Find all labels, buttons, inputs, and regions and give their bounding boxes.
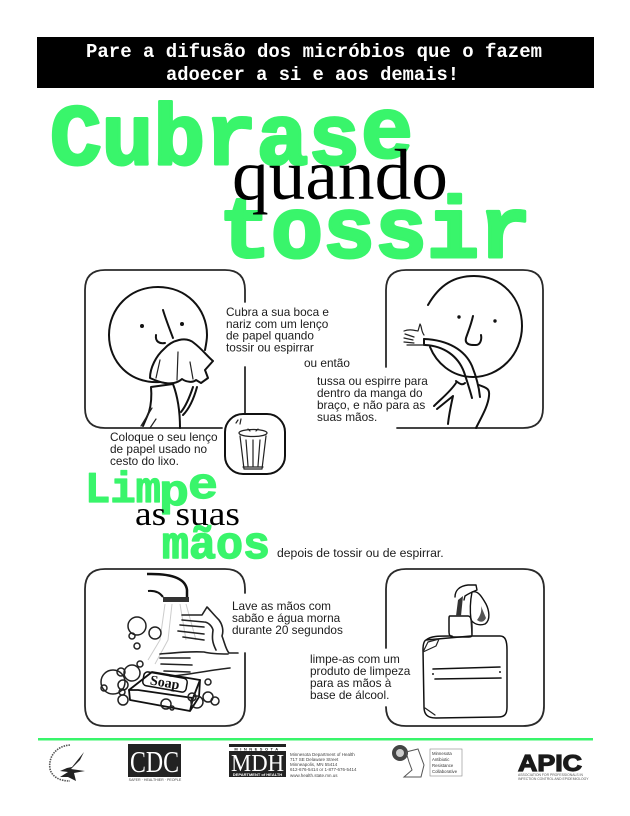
logo: Minnesota Antibiotic Resistance Collaborative: Collaborative [432, 769, 458, 774]
title: Cubrase quando tossir: e [361, 85, 413, 183]
text: MDH address: 717 SE Delaware Street [290, 757, 339, 762]
panel: hand sanitizer [386, 569, 544, 726]
text: cover mouth instructions: tossir ou espirrar [226, 340, 314, 354]
title: Limpe as suas mãos: as suas [135, 496, 240, 533]
icon: sanitizer bottle [423, 585, 507, 718]
title: Cubrase quando tossir: tossir [219, 185, 531, 283]
logo: CDC: CDC [130, 744, 179, 779]
icon: faucet [147, 574, 196, 664]
icon: head with raised arm [404, 276, 522, 428]
icon: soap bar: Soap [149, 674, 181, 693]
text: or then: ou então [304, 356, 350, 370]
banner [37, 37, 594, 88]
panel: cover with tissue [85, 270, 245, 428]
logo: Minnesota Antibiotic Resistance Collaborative: Minnesota [432, 751, 452, 756]
text: cover mouth instructions: de papel quando [226, 328, 314, 342]
text: cover mouth instructions: Cubra a sua boca e [226, 305, 329, 319]
logo: Minnesota Antibiotic Resistance Collaborative: Resistance [432, 763, 454, 768]
logo: APIC: APIC [518, 750, 582, 776]
logo: Minnesota Antibiotic Resistance Collaborative [392, 745, 462, 777]
logo: APIC: ASSOCIATION FOR PROFESSIONALS IN [518, 773, 583, 777]
text: sanitizer instructions: produto de limpeza [310, 664, 411, 678]
text: sleeve instructions: tussa ou espirre para [317, 374, 428, 388]
icon: hands [160, 607, 238, 676]
panel: cough into sleeve [386, 270, 543, 428]
logo: APIC [518, 750, 589, 781]
text: wash instructions: durante 20 segundos [232, 623, 343, 637]
banner: adoecer a si e aos demais! [166, 64, 459, 86]
text: MDH address: 612-676-5414 or 1-877-676-5414 [290, 767, 357, 772]
footer rule [38, 738, 593, 740]
title: Cubrase quando tossir [50, 85, 531, 283]
text: sleeve instructions: braço, e não para as [317, 398, 425, 412]
text: wash instructions: Lave as mãos com [232, 599, 331, 613]
banner: Pare a difusão dos micróbios que o fazem [86, 41, 542, 63]
logo: HHS [50, 745, 85, 781]
text: MDH address: Minneapolis, MN 55414 [290, 762, 338, 767]
text: bin instructions: cesto do lixo. [110, 454, 179, 468]
text: after coughing: depois de tossir ou de espirrar. [277, 546, 444, 560]
text: bin instructions: de papel usado no [110, 442, 208, 456]
text: MDH address [290, 752, 357, 778]
icon: soap bar [129, 671, 200, 711]
title: Limpe as suas mãos [85, 462, 270, 572]
text: sleeve instructions: dentro da manga do [317, 386, 423, 400]
text: sleeve instructions: suas mãos. [317, 410, 377, 424]
text: wash instructions: sabão e água morna [232, 611, 341, 625]
logo: MDH: MINNESOTA [234, 746, 281, 752]
text: sanitizer instructions: limpe-as com um [310, 652, 400, 666]
title: Cubrase quando tossir: quando [232, 135, 448, 215]
logo: Minnesota Antibiotic Resistance Collaborative: Antibiotic [432, 757, 450, 762]
logo: CDC: SAFER · HEALTHIER · PEOPLE [129, 778, 182, 782]
logo: MDH: DEPARTMENT of HEALTH [233, 772, 282, 777]
text: MDH address: Minnesota Department of Health [290, 752, 355, 757]
logo: MDH: MDH [231, 751, 284, 777]
text: sanitizer instructions: para as mãos à [310, 676, 392, 690]
title: Limpe as suas mãos: e [188, 462, 218, 512]
text: cover mouth instructions: nariz com um lenço [226, 317, 329, 331]
text: sanitizer instructions: base de álcool. [310, 688, 389, 702]
title: Limpe as suas mãos: mãos [162, 521, 270, 572]
panel: wash hands [85, 569, 245, 726]
logo: APIC: INFECTION CONTROL AND EPIDEMIOLOGY [518, 777, 589, 781]
title: Limpe as suas mãos: p [159, 469, 189, 519]
title: Cubrase quando tossir: Cubras [50, 92, 360, 190]
text: MDH address: www.health.state.mn.us [290, 773, 338, 778]
text: bin instructions: Coloque o seu lenço [110, 430, 218, 444]
icon: waste bin [225, 414, 285, 474]
title: Limpe as suas mãos: Lim [85, 466, 161, 516]
icon: head with tissue [109, 287, 213, 428]
icon: bubbles [101, 617, 219, 710]
